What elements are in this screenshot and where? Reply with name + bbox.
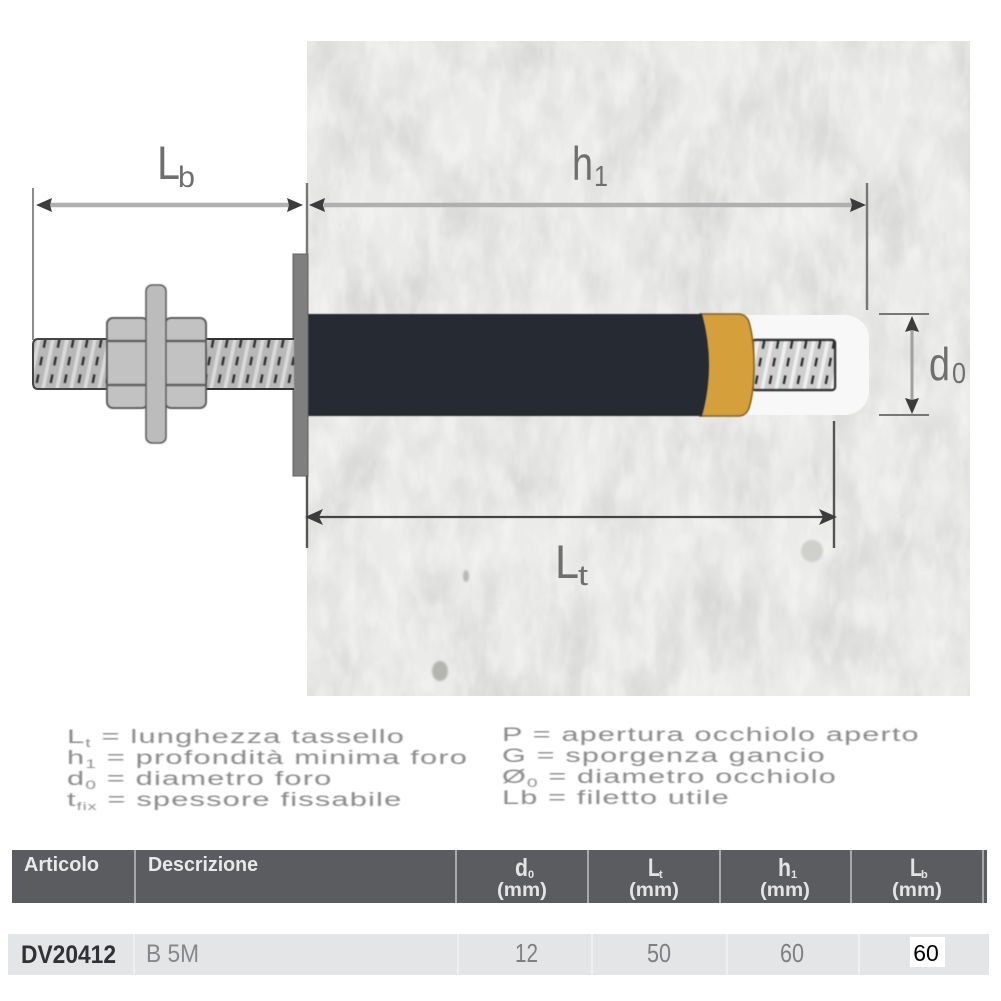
dimension: Lb: b bbox=[178, 161, 195, 194]
legend: right column bbox=[502, 724, 920, 809]
legend: left column: 0 bbox=[85, 779, 97, 792]
dimension: Lb bbox=[33, 136, 303, 340]
drilled hole bbox=[720, 315, 869, 415]
icon: black anchor sleeve bbox=[307, 314, 709, 416]
table row: DV20412: 50 bbox=[647, 938, 671, 968]
table header: 0 bbox=[528, 869, 534, 881]
legend: left column: = lunghezza tassello bbox=[92, 726, 405, 748]
dimension: h1 bbox=[307, 137, 867, 310]
legend: left column: t bbox=[67, 789, 77, 811]
table header: L bbox=[648, 854, 660, 882]
table row: DV20412: 60 bbox=[913, 940, 939, 966]
icon: hex nuts and washer bbox=[107, 285, 206, 443]
table row: DV20412: 12 bbox=[515, 938, 538, 968]
dimension: Lb: L bbox=[157, 136, 180, 189]
dimension: d0 bbox=[879, 314, 966, 415]
table header: Articolo bbox=[24, 854, 99, 876]
table header: (mm) bbox=[497, 880, 547, 901]
table header: (mm) bbox=[892, 880, 942, 901]
table header: d bbox=[515, 854, 528, 882]
legend: right column: Ø bbox=[502, 766, 527, 788]
dimension: Lt bbox=[305, 421, 837, 592]
table header: L bbox=[910, 854, 922, 882]
icon: gold capsule tip bbox=[700, 314, 754, 416]
legend: left column: L bbox=[67, 726, 85, 748]
table row: DV20412: 60 bbox=[780, 938, 804, 968]
legend: left column: fix bbox=[77, 801, 98, 813]
dimension: Lt: t bbox=[578, 560, 588, 592]
table header: (mm) bbox=[760, 880, 810, 901]
table header: Descrizione bbox=[148, 854, 258, 876]
legend: right column: Lb = filetto utile bbox=[502, 787, 730, 809]
table header: h bbox=[778, 854, 791, 882]
legend: right column: = diametro occhiolo bbox=[539, 766, 837, 788]
table header: (mm) bbox=[629, 880, 679, 901]
legend: left column: d bbox=[67, 768, 85, 790]
table header bbox=[12, 850, 987, 903]
table row: DV20412: B 5M bbox=[146, 940, 199, 968]
legend: left column: t bbox=[85, 737, 92, 750]
legend: left column: 1 bbox=[85, 758, 97, 771]
dimension: Lt: L bbox=[555, 535, 579, 588]
dimension: d0: 0 bbox=[952, 358, 966, 390]
table header: 1 bbox=[791, 869, 797, 881]
table row: DV20412: DV20412 bbox=[21, 941, 116, 969]
icon: threaded rod left bbox=[33, 339, 294, 389]
legend: right column: 0 bbox=[527, 777, 539, 790]
icon: steel fixing plate bbox=[293, 254, 308, 476]
table header: b bbox=[921, 869, 928, 881]
legend: left column: = diametro foro bbox=[97, 768, 332, 790]
dimension: d0: d bbox=[929, 338, 950, 390]
table header: t bbox=[659, 869, 663, 881]
legend: left column bbox=[67, 726, 468, 813]
panel: concrete background bbox=[307, 41, 970, 696]
legend: right column: P = apertura occhiolo aperto bbox=[502, 724, 920, 746]
icon: anchor threaded rod right end bbox=[752, 340, 835, 390]
legend: left column: = spessore fissabile bbox=[98, 789, 402, 811]
dimension: h1: 1 bbox=[594, 161, 608, 193]
legend: left column: = profondità minima foro bbox=[97, 747, 468, 769]
legend: right column: G = sporgenza gancio bbox=[502, 745, 826, 767]
legend: left column: h bbox=[67, 747, 85, 769]
dimension: h1: h bbox=[572, 137, 593, 190]
table row: DV20412 bbox=[8, 934, 989, 975]
